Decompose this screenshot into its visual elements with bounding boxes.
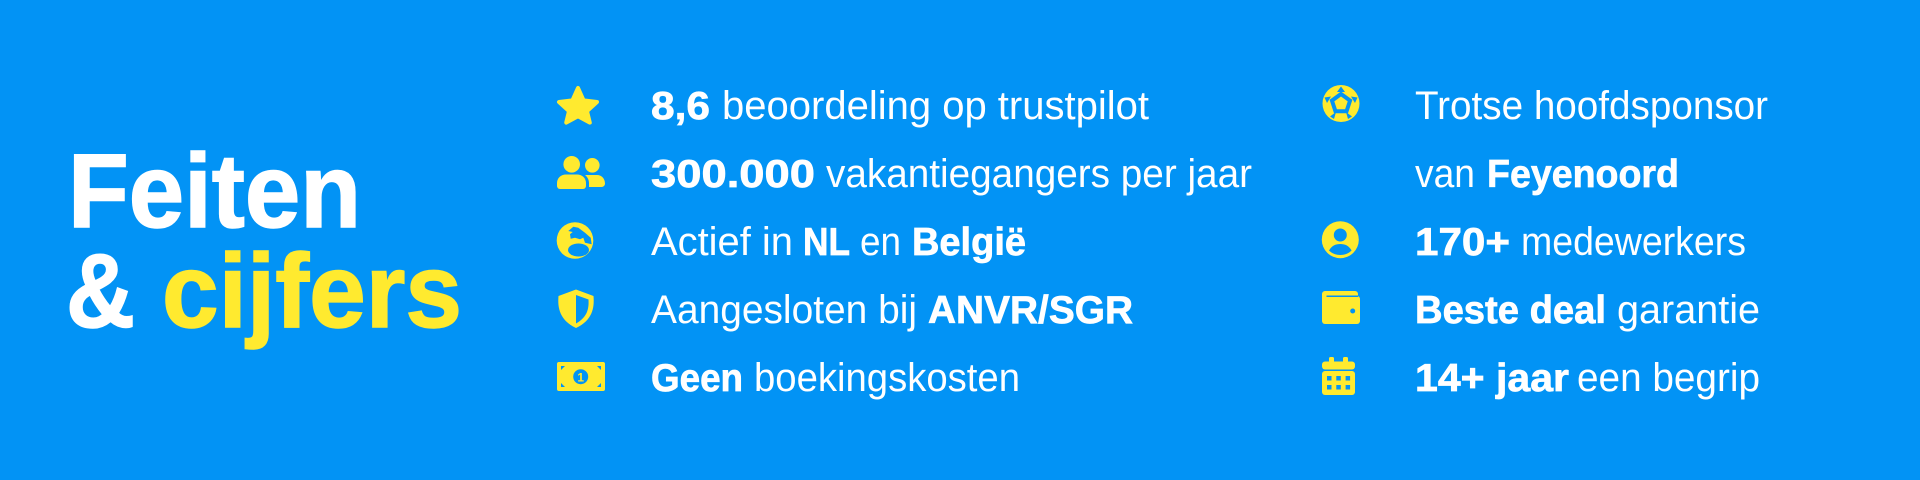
fact: booking costs	[651, 356, 1020, 400]
fact: memberships: ANVR/SGR	[928, 289, 1133, 332]
title	[66, 133, 462, 350]
fact: memberships	[651, 288, 1133, 332]
title: &	[66, 233, 135, 350]
icon: calendar	[1322, 357, 1355, 395]
fact: holidaymakers	[651, 152, 1252, 196]
icon: banknote	[557, 362, 605, 391]
fact: sponsor: van	[1415, 152, 1475, 196]
fact: active regions: NL	[803, 221, 850, 264]
icon: person	[1322, 221, 1359, 258]
icon: banknote: 1	[577, 370, 584, 384]
fact: best deal: Beste deal	[1415, 289, 1606, 332]
fact: memberships: Aangesloten bij	[651, 288, 917, 332]
fact: best deal	[1415, 288, 1760, 332]
panel: left facts column	[557, 84, 1252, 400]
fact: booking costs: Geen	[651, 357, 743, 400]
fact: holidaymakers: 300.000	[651, 153, 815, 196]
title: cijfers	[162, 233, 462, 350]
icon: globe	[557, 222, 593, 259]
fact: active regions: België	[912, 221, 1026, 264]
fact: sponsor: Trotse hoofdsponsor	[1415, 84, 1768, 128]
fact: best deal: garantie	[1617, 288, 1760, 332]
title: Feiten	[68, 133, 361, 250]
fact: trustpilot rating: beoordeling op trustpilot	[722, 84, 1149, 128]
icon: wallet	[1322, 291, 1360, 324]
fact: active regions: Actief in	[651, 220, 793, 264]
icon: people	[557, 156, 605, 189]
panel: right facts column	[1322, 84, 1768, 400]
fact: holidaymakers: vakantiegangers per jaar	[826, 152, 1252, 196]
fact: trustpilot rating: 8,6	[651, 85, 710, 128]
icon: football	[1322, 85, 1360, 122]
icon: shield	[558, 290, 594, 328]
fact: years: een begrip	[1577, 356, 1760, 400]
icon: star	[559, 88, 597, 123]
fact: employees: 170+	[1415, 221, 1510, 264]
fact: active regions	[651, 220, 1026, 264]
fact: employees: medewerkers	[1521, 220, 1746, 264]
fact: active regions: en	[860, 220, 901, 264]
fact: years: 14+ jaar	[1415, 357, 1569, 400]
fact: employees	[1415, 220, 1746, 264]
fact: sponsor: Feyenoord	[1487, 153, 1679, 196]
fact: years	[1415, 356, 1760, 400]
fact: booking costs: boekingskosten	[754, 356, 1020, 400]
fact: sponsor	[1415, 84, 1768, 196]
